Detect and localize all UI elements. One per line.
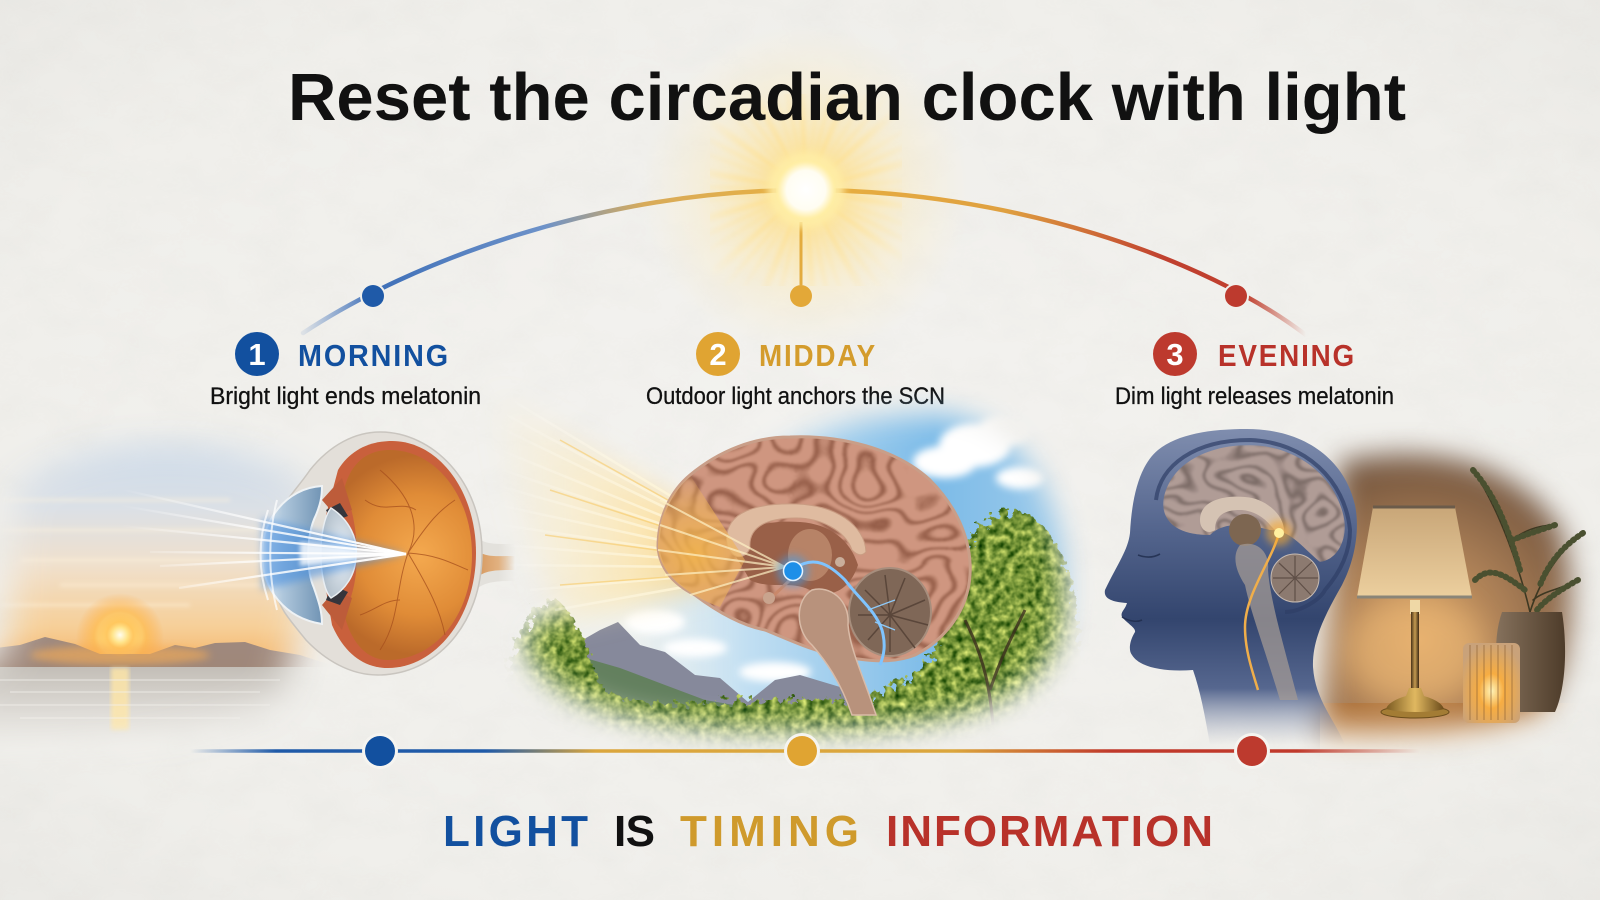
tagline: INFORMATION [886, 807, 1213, 856]
retina [344, 450, 472, 660]
head silhouette with brain [1105, 429, 1357, 745]
golden tint on frontal lobe [658, 475, 745, 607]
sky [646, 392, 1082, 704]
sunrise scene [0, 434, 318, 734]
icon: sun core [768, 152, 844, 228]
marker: midday [784, 733, 820, 769]
label: midday: MIDDAY [759, 338, 877, 373]
lens [321, 508, 356, 598]
label: midday: Outdoor light anchors the SCN [646, 383, 945, 410]
cornea [262, 486, 322, 624]
tagline: TIMING [680, 807, 859, 856]
brainstem [1235, 544, 1298, 700]
label: morning: 1 [248, 337, 266, 372]
cerebrum [1163, 445, 1345, 562]
arc path [303, 190, 1306, 335]
timeline bar [190, 733, 1420, 769]
evening scene: warm room [1303, 433, 1592, 756]
tree trunk [965, 610, 1025, 725]
cerebellum [1271, 554, 1319, 602]
sclera [275, 432, 482, 675]
cerebrum with gyri folds [658, 437, 970, 661]
brain illustration [658, 437, 970, 715]
foliage [495, 510, 1081, 765]
pituitary [763, 557, 845, 604]
marker: evening [1234, 733, 1270, 769]
label: midday: 2 [709, 337, 727, 372]
title: Reset the circadian clock with light [288, 60, 1406, 135]
light rays into brain [495, 396, 790, 622]
arc node: evening [1223, 283, 1249, 309]
label: evening: 3 [1166, 337, 1184, 372]
choroid [326, 441, 476, 668]
tagline [443, 807, 1213, 856]
skull rim [1156, 440, 1350, 612]
midday landscape [508, 392, 1082, 749]
tagline: IS [614, 807, 655, 856]
corpus callosum [727, 504, 866, 557]
marker: morning [362, 733, 398, 769]
label: evening: Dim light releases melatonin [1115, 383, 1394, 410]
corpus callosum [1200, 497, 1284, 533]
melatonin glow pathway [1245, 520, 1292, 690]
label: morning: Bright light ends melatonin [210, 383, 481, 410]
icon: table lamp [1357, 507, 1472, 718]
label: morning [210, 332, 481, 410]
icon: pot [1496, 612, 1565, 712]
arc node: midday [790, 222, 812, 307]
sun arc timeline [303, 190, 1306, 335]
brainstem [799, 589, 876, 715]
inner midbrain [735, 522, 858, 594]
iris [322, 478, 352, 630]
label: evening [1115, 332, 1394, 410]
SCN marker [777, 555, 895, 665]
facial details [1122, 554, 1160, 621]
light beams [110, 490, 406, 610]
optic nerve [474, 534, 515, 592]
icon: plant [1473, 470, 1583, 612]
icon: eye cross-section [110, 432, 515, 675]
brain outline [658, 437, 970, 661]
mountains [583, 622, 847, 706]
clouds [625, 414, 1044, 682]
arc node: morning [360, 283, 386, 309]
icon: candle [1463, 643, 1520, 723]
tagline: LIGHT [443, 807, 588, 856]
rays over frontal lobe [658, 500, 785, 595]
label: midday [646, 332, 945, 410]
retinal veins [360, 470, 468, 650]
cerebellum [849, 568, 931, 656]
icon: midday sun glow [641, 25, 971, 355]
label: evening: EVENING [1218, 338, 1356, 373]
label: morning: MORNING [298, 338, 450, 373]
